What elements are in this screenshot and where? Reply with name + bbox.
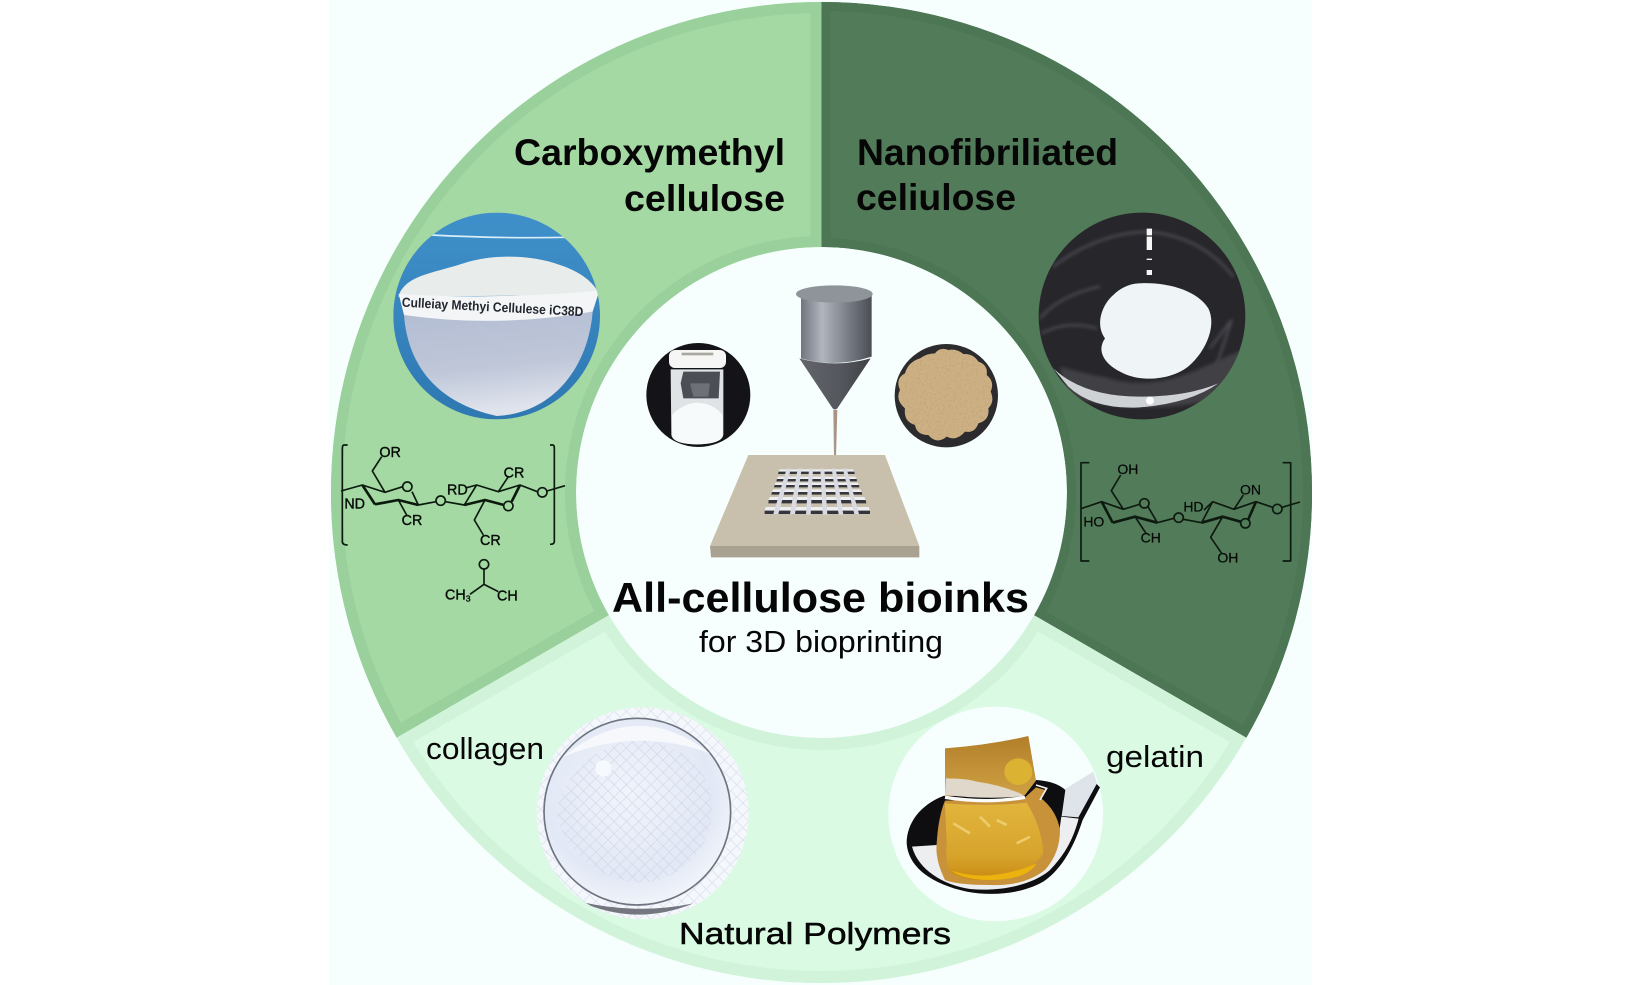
heading: carboxymethyl cellulose: Carboxymethyl [514, 132, 785, 173]
chemical structure: carboxymethyl cellulose: CR [480, 533, 501, 549]
title: all-cellulose bioinks: All-cellulose bioinks [612, 574, 1029, 621]
photo: nanofibrillated cellulose gel [1037, 210, 1250, 423]
background panel [329, 0, 1312, 985]
chemical structure: nanofibrillated cellulose: ON [1240, 482, 1261, 498]
chemical structure: nanofibrillated cellulose: OH [1217, 549, 1238, 565]
chemical structure: carboxymethyl cellulose: CR [402, 513, 422, 529]
chemical structure: carboxymethyl cellulose: OR [379, 445, 401, 461]
chemical structure: nanofibrillated cellulose: OH [1117, 461, 1138, 477]
chemical structure: carboxymethyl cellulose: ND [344, 497, 365, 513]
photo: collagen droplet on mesh [537, 707, 749, 919]
chemical structure: nanofibrillated cellulose: HO [1083, 513, 1104, 529]
photo: carboxymethyl cellulose powder in bowl: Culleiay Methyi Cellulese iC38D [402, 295, 584, 319]
label: gelatin: gelatin [1106, 739, 1204, 774]
chemical structure: carboxymethyl cellulose: RD [447, 482, 468, 498]
photo: cellulose fibre disc [895, 344, 998, 447]
label: natural polymers: Natural Polymers [679, 916, 951, 951]
icon: printing plate with printed scaffold grid [710, 455, 919, 557]
subtitle: for 3D bioprinting: for 3D bioprinting [699, 624, 943, 659]
heading: nanofibrillated cellulose: Nanofibriliated [857, 132, 1118, 173]
label: collagen: collagen [426, 731, 544, 766]
panel: carboxymethyl cellulose sector [331, 2, 822, 738]
chemical structure: carboxymethyl cellulose [341, 445, 565, 605]
photo: gelatin cube on spoon [888, 707, 1103, 921]
chemical structure: carboxymethyl cellulose: CH [497, 589, 518, 605]
photo: carboxymethyl cellulose powder in bowl [393, 213, 600, 419]
panel: nanofibrillated cellulose sector [822, 2, 1312, 738]
heading: carboxymethyl cellulose [514, 132, 785, 219]
heading: carboxymethyl cellulose: cellulose [624, 178, 785, 219]
heading: nanofibrillated cellulose: celiulose [856, 177, 1016, 218]
photo: white bioink jar [646, 343, 750, 447]
chemical structure: nanofibrillated cellulose: HD [1183, 498, 1204, 514]
icon: bioprinting nozzle [796, 285, 873, 457]
chemical structure: carboxymethyl cellulose: 3 [466, 594, 471, 604]
heading: nanofibrillated cellulose [856, 132, 1118, 218]
chemical structure: carboxymethyl cellulose: CH [445, 588, 466, 604]
chemical structure: carboxymethyl cellulose: CR [504, 465, 524, 481]
panel: natural polymers sector [397, 615, 1246, 983]
chemical structure: nanofibrillated cellulose [1081, 461, 1300, 565]
chemical structure: nanofibrillated cellulose: CH [1141, 530, 1161, 546]
